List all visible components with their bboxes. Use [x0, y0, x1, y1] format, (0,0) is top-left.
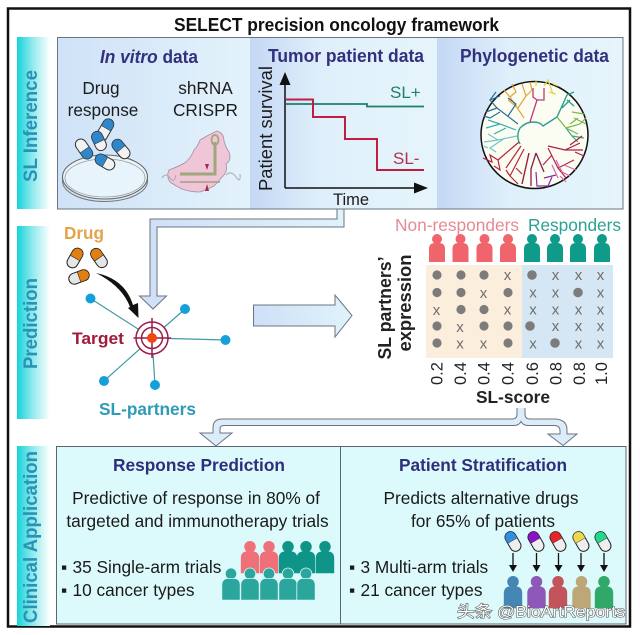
curve: SL- — [286, 100, 424, 170]
icon: target — [134, 318, 171, 358]
sidebar: SL Inference — [17, 37, 50, 209]
label: SL-score: SL-score — [476, 387, 550, 407]
watermark: 头条 @BioArtReports — [457, 603, 625, 621]
matrix crosses: x — [597, 302, 605, 318]
matrix crosses: x — [504, 302, 512, 318]
matrix crosses: x — [552, 284, 560, 302]
curve: SL+ — [286, 104, 424, 106]
arrow: drug to target — [96, 273, 138, 318]
bullets: 3 Multi-arm trials — [360, 557, 489, 577]
text block: targeted and immunotherapy trials — [66, 511, 329, 531]
SL-score values: 0.2 — [428, 362, 446, 385]
matrix crosses: x — [504, 267, 512, 284]
matrix crosses: x — [575, 318, 583, 335]
SL-score values: 0.8 — [548, 362, 566, 385]
matrix crosses: x — [480, 285, 488, 302]
text: drug response: response — [68, 100, 138, 120]
heading: in vitro data: In vitro data — [100, 47, 199, 67]
SL-score values: 0.6 — [524, 362, 542, 385]
icon: petri dish with pills — [62, 117, 148, 202]
matrix crosses: x — [529, 284, 537, 302]
matrix crosses: x — [552, 267, 560, 284]
SL-score values: 0.4 — [476, 362, 494, 385]
matrix crosses: x — [480, 336, 488, 352]
SL-score values: 0.4 — [452, 362, 470, 385]
heading: Response Prediction — [113, 455, 285, 475]
panel: patient stratification — [340, 446, 626, 624]
text: shRNA CRISPR: shRNA — [178, 78, 233, 98]
matrix crosses: x — [575, 336, 583, 352]
SL-score values: 0.8 — [571, 362, 589, 385]
icon: cell with guide RNA — [162, 131, 240, 192]
SL-score values — [428, 362, 611, 385]
sidebar: Clinical Application — [17, 446, 50, 626]
heading: tumor patient data: Tumor patient data — [268, 46, 425, 66]
axis label: time: Time — [333, 191, 369, 209]
sidebar: Prediction — [17, 226, 50, 419]
icons: coloured pills — [503, 530, 613, 553]
matrix crosses: x — [597, 336, 605, 352]
label: responders: Responders — [528, 215, 621, 235]
panel: prediction network — [64, 223, 230, 419]
bullets: ▪ — [61, 580, 67, 600]
matrix crosses: x — [456, 336, 464, 352]
text block: Predictive of response in 80% of — [72, 488, 320, 508]
heading: phylogenetic data: Phylogenetic data — [460, 46, 610, 66]
label: non-responders: Non-responders — [395, 215, 519, 235]
network edges — [90, 298, 226, 385]
text block: for 65% of patients — [411, 511, 555, 531]
axis label: patient survival: Patient survival — [256, 66, 276, 191]
label: drug: Drug — [64, 223, 104, 243]
label: SL+: SL+ — [390, 83, 421, 102]
panel: SL inference — [58, 38, 623, 209]
matrix crosses: x — [575, 302, 583, 318]
matrix dots — [432, 270, 583, 348]
chart: phylogenetic tree — [481, 80, 588, 188]
matrix crosses: x — [552, 302, 560, 318]
matrix crosses: x — [433, 302, 441, 319]
matrix crosses: x — [597, 318, 605, 335]
bullets: ▪ — [349, 580, 355, 600]
icons: coloured patients — [504, 576, 613, 608]
SL-partner nodes — [86, 294, 230, 390]
matrix crosses: x — [575, 267, 583, 284]
sidebar: Prediction: Prediction — [21, 278, 42, 369]
SL-score values: 0.4 — [500, 362, 518, 385]
text: drug response: Drug — [82, 78, 120, 98]
chart: survival curves — [256, 66, 428, 209]
label: SL-: SL- — [393, 149, 419, 168]
heading: Patient Stratification — [399, 455, 567, 475]
bullets: 35 Single-arm trials — [72, 557, 222, 577]
bullets: ▪ — [61, 557, 67, 577]
icons: patients — [429, 234, 610, 262]
matrix crosses: x — [597, 284, 605, 302]
matrix crosses: x — [529, 336, 537, 352]
matrix crosses: x — [597, 267, 605, 284]
arrows: pills to patients — [509, 553, 608, 572]
matrix crosses: x — [552, 318, 560, 335]
axes — [285, 80, 418, 188]
text block: Predicts alternative drugs — [384, 488, 579, 508]
label: SL-partners: SL-partners — [99, 399, 196, 419]
icons: patient group — [222, 541, 334, 600]
arrow: prediction to matrix — [254, 295, 352, 337]
sidebar: Clinical Application: Clinical Application — [21, 451, 42, 623]
matrix background — [426, 265, 522, 358]
matrix crosses: x — [456, 319, 464, 336]
panel: expression matrix — [375, 215, 621, 407]
sidebar: SL Inference: SL Inference — [21, 70, 42, 182]
matrix crosses — [433, 267, 605, 352]
icon: drug pills — [65, 246, 110, 286]
axis label: SL partners: SL partners’ — [375, 256, 395, 360]
matrix crosses: x — [529, 302, 537, 318]
arrow: split to applications — [200, 408, 577, 446]
axis label: expression: expression — [395, 254, 415, 352]
bullets: ▪ — [349, 557, 355, 577]
bullets: 10 cancer types — [72, 580, 195, 600]
panel: response prediction — [56, 446, 340, 624]
label: target: Target — [72, 329, 124, 348]
title: SELECT precision oncology framework — [174, 15, 500, 35]
SL-score values: 1.0 — [593, 362, 611, 385]
bullets: 21 cancer types — [360, 580, 483, 600]
arrow: data to target — [140, 209, 344, 309]
text: shRNA CRISPR: CRISPR — [173, 100, 238, 120]
